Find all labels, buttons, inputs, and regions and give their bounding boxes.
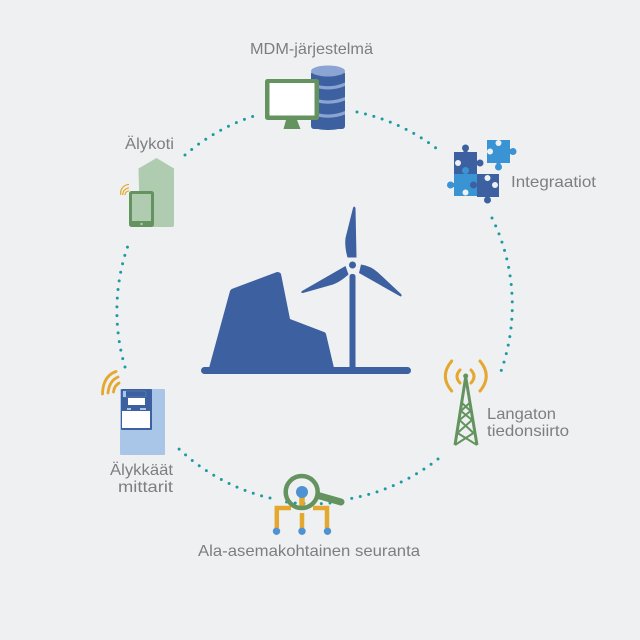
label: Integraatiot: Integraatiot <box>511 174 597 191</box>
label: Älykkäät mittarit: Älykkäät <box>110 461 174 479</box>
puzzle bottom left <box>447 167 477 196</box>
tree connectors <box>277 497 327 528</box>
database <box>311 66 345 130</box>
puzzle top left <box>454 144 484 175</box>
label: MDM: MDM-järjestelmä <box>250 41 373 58</box>
label: Älykkäät mittarit <box>110 461 174 496</box>
magnifier <box>286 476 341 508</box>
monitor <box>265 79 319 129</box>
building <box>209 272 334 368</box>
tablet <box>129 191 154 227</box>
label: wireless communication <box>487 406 569 440</box>
icon: MDM system <box>265 66 345 130</box>
meter body <box>121 389 152 430</box>
icon: substation monitoring <box>273 476 341 535</box>
icon: smart home <box>121 158 174 227</box>
puzzle top right <box>487 140 516 170</box>
turbine blades <box>345 206 356 258</box>
puzzle bottom right <box>470 174 499 204</box>
wifi waves <box>102 372 119 394</box>
turbine tower <box>350 274 356 369</box>
tree nodes <box>273 486 331 535</box>
tower <box>455 377 477 445</box>
turbine hub <box>349 262 356 268</box>
dotted ring <box>117 112 512 504</box>
central icon: power plant and wind turbine <box>201 206 411 374</box>
label: Älykkäät mittarit: mittarit <box>118 479 174 496</box>
ground line <box>201 367 411 374</box>
label: substation monitoring: Ala-asemakohtainen seuranta <box>198 543 420 560</box>
icon: smart meters <box>102 372 165 455</box>
label: wireless communication: Langaton <box>487 406 556 423</box>
house <box>138 158 174 227</box>
label: Älykoti: Älykoti <box>125 135 174 153</box>
radio waves <box>445 361 486 391</box>
meter backing <box>120 389 165 455</box>
label: wireless communication: tiedonsiirto <box>487 423 569 440</box>
icon: puzzle pieces <box>447 140 516 204</box>
wifi waves <box>121 184 128 194</box>
tower tip <box>463 374 468 378</box>
icon: radio tower <box>445 361 486 445</box>
